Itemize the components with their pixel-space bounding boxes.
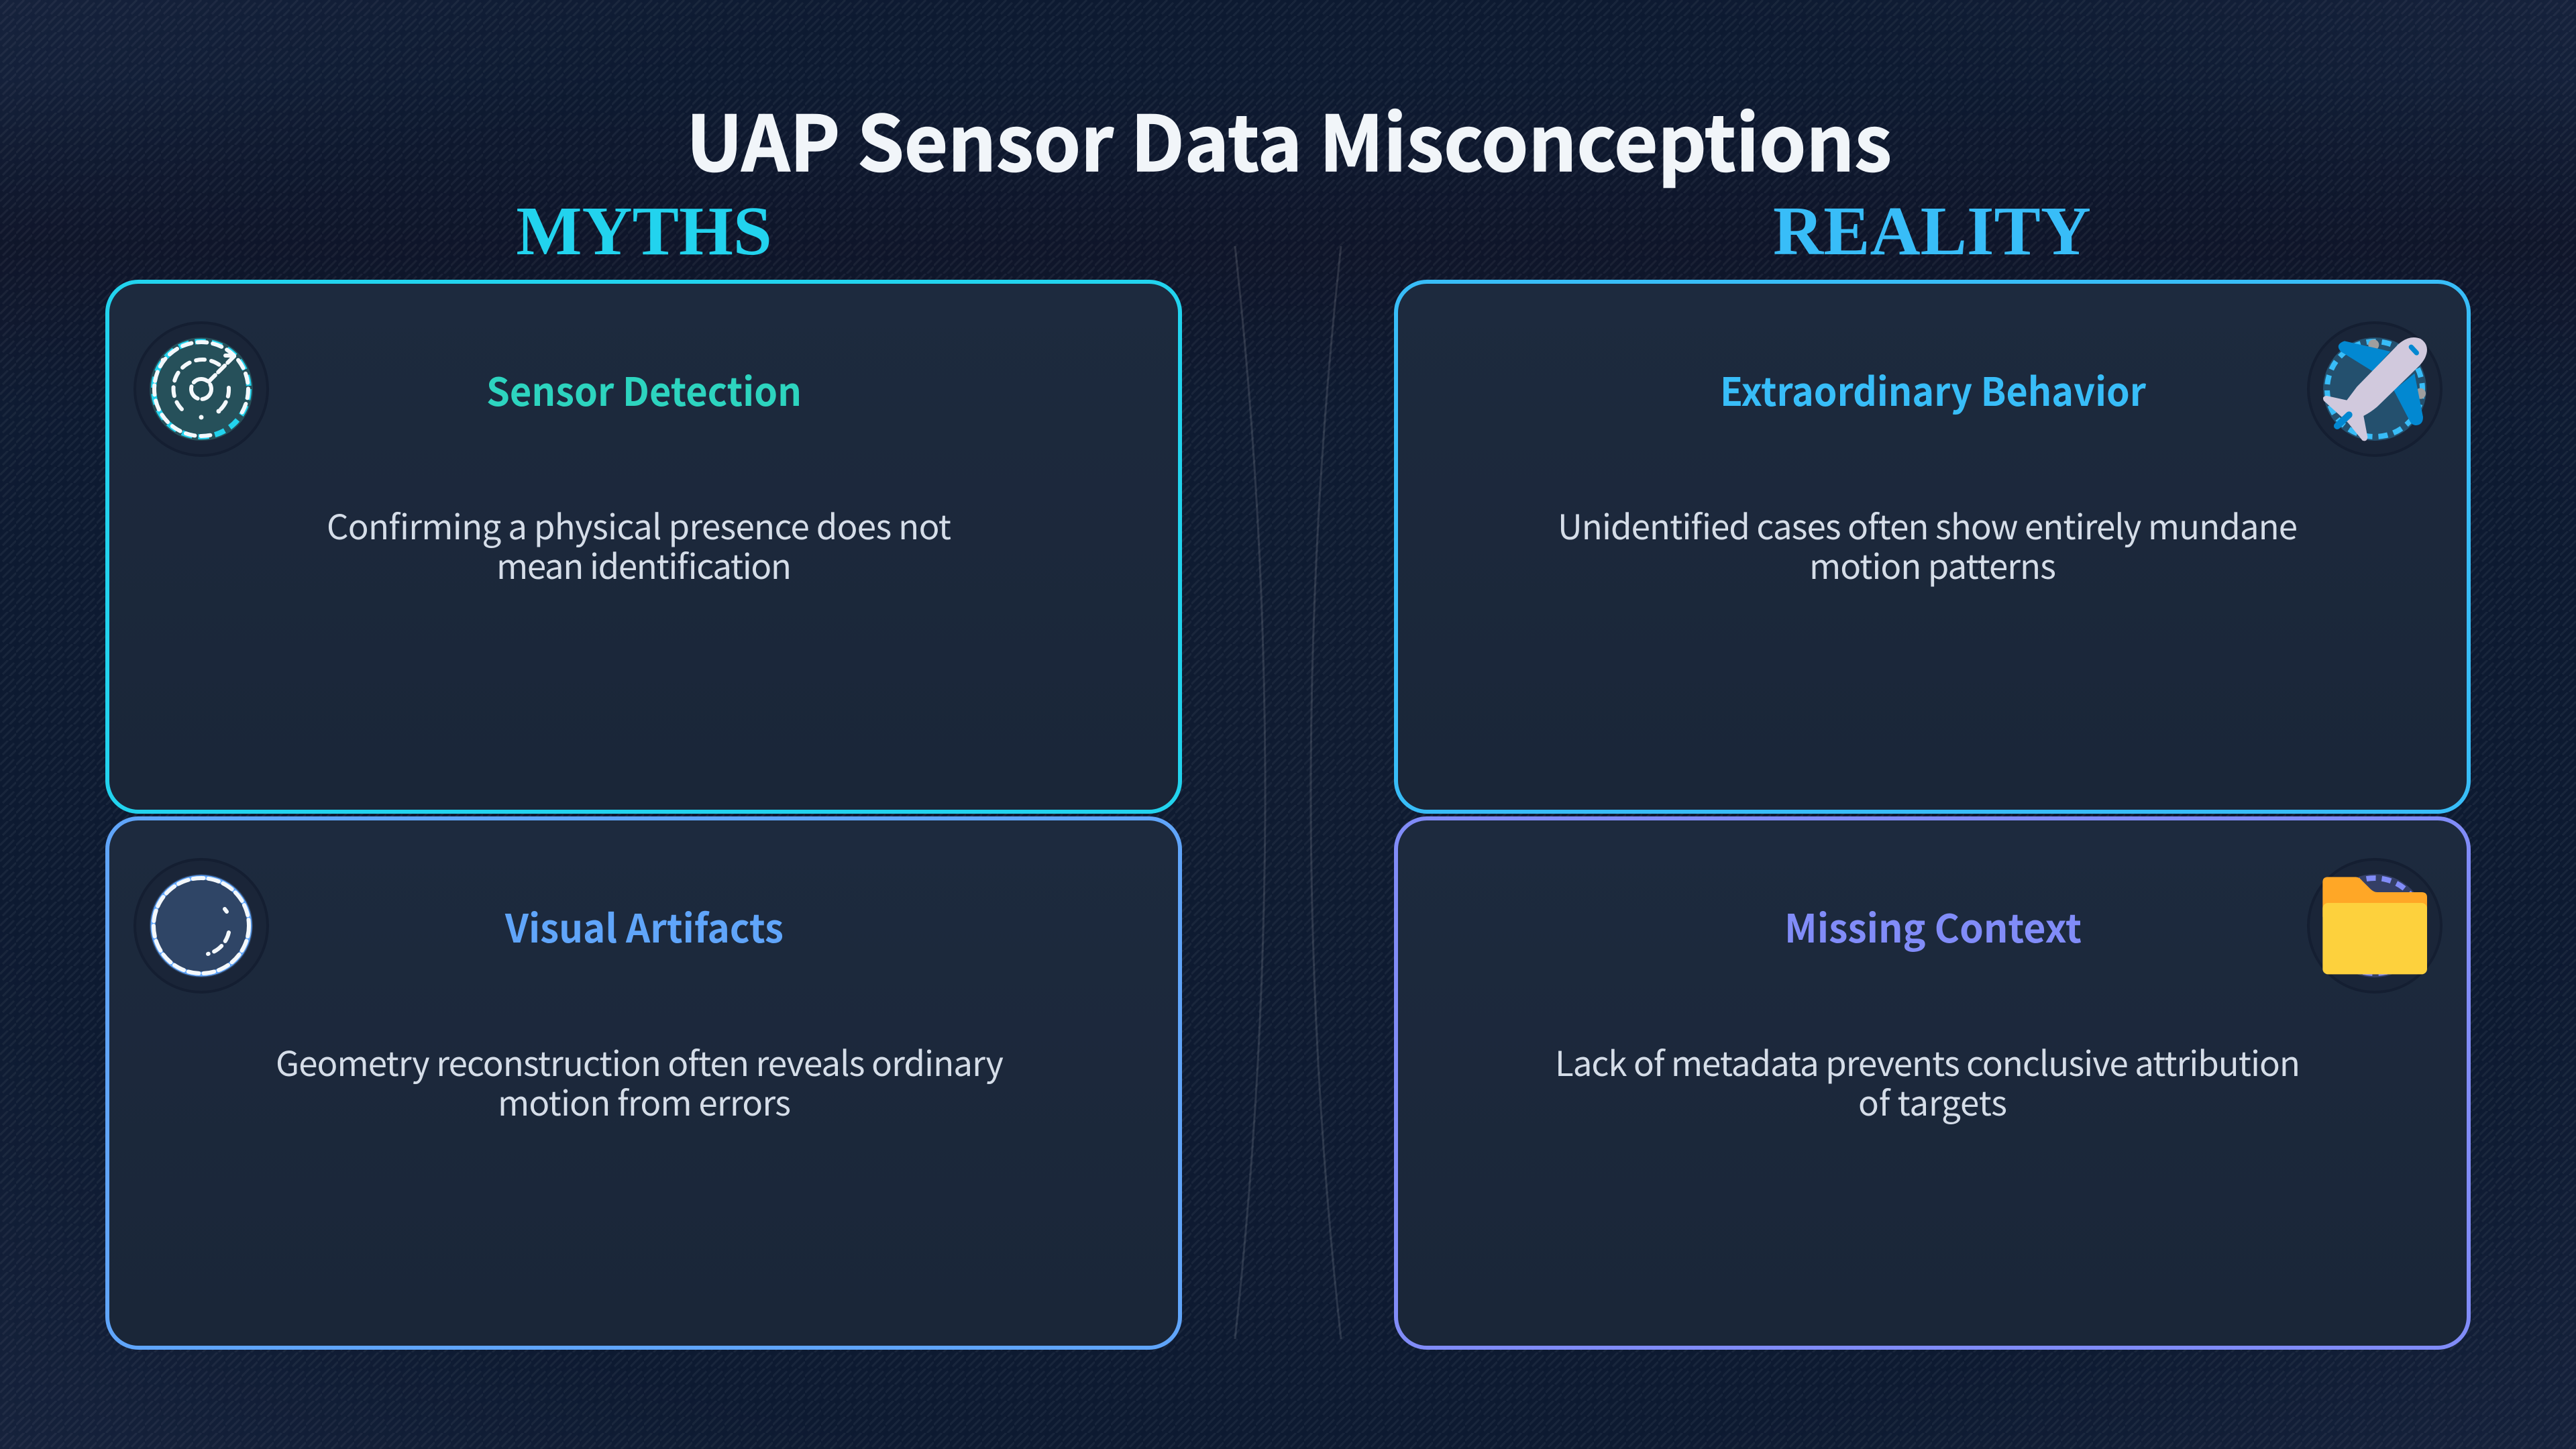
card title: sensor detection: Sensor Detection bbox=[486, 361, 802, 417]
card text: missing context: Lack of metadata prevents conclusive attribution bbox=[1555, 1036, 2300, 1086]
card title: visual artifacts: Visual Artifacts bbox=[504, 898, 784, 954]
title: UAP Sensor Data Misconceptions bbox=[686, 83, 1892, 193]
card text: sensor detection: mean identification bbox=[496, 539, 792, 589]
icon: lens circle bbox=[135, 859, 268, 992]
heading: reality: REALITY bbox=[1773, 193, 2091, 270]
icon: folder bbox=[2308, 859, 2441, 992]
icon: airplane bbox=[2308, 323, 2441, 455]
card text: missing context: of targets bbox=[1858, 1076, 2007, 1126]
panel: sensor detection bbox=[107, 282, 1180, 812]
card text: extraordinary behavior bbox=[1558, 500, 2298, 589]
heading: myths: MYTHS bbox=[516, 193, 772, 270]
icon: radar bbox=[135, 323, 268, 455]
panel: missing context bbox=[1396, 818, 2469, 1348]
panel: extraordinary behavior bbox=[1396, 282, 2469, 812]
card text: missing context bbox=[1555, 1036, 2300, 1126]
card text: visual artifacts: Geometry reconstruction often reveals ordinary bbox=[276, 1036, 1004, 1086]
card text: extraordinary behavior: Unidentified cases often show entirely mundane bbox=[1558, 500, 2298, 549]
panel: visual artifacts bbox=[107, 818, 1180, 1348]
card text: sensor detection bbox=[327, 500, 951, 589]
center divider curves bbox=[1235, 246, 1341, 1339]
card text: visual artifacts: motion from errors bbox=[498, 1076, 791, 1126]
card title: missing context: Missing Context bbox=[1784, 898, 2082, 954]
card text: visual artifacts bbox=[276, 1036, 1004, 1126]
card text: extraordinary behavior: motion patterns bbox=[1809, 539, 2056, 589]
card title: extraordinary behavior: Extraordinary Behavior bbox=[1720, 361, 2147, 417]
card text: sensor detection: Confirming a physical presence does not bbox=[327, 500, 951, 549]
